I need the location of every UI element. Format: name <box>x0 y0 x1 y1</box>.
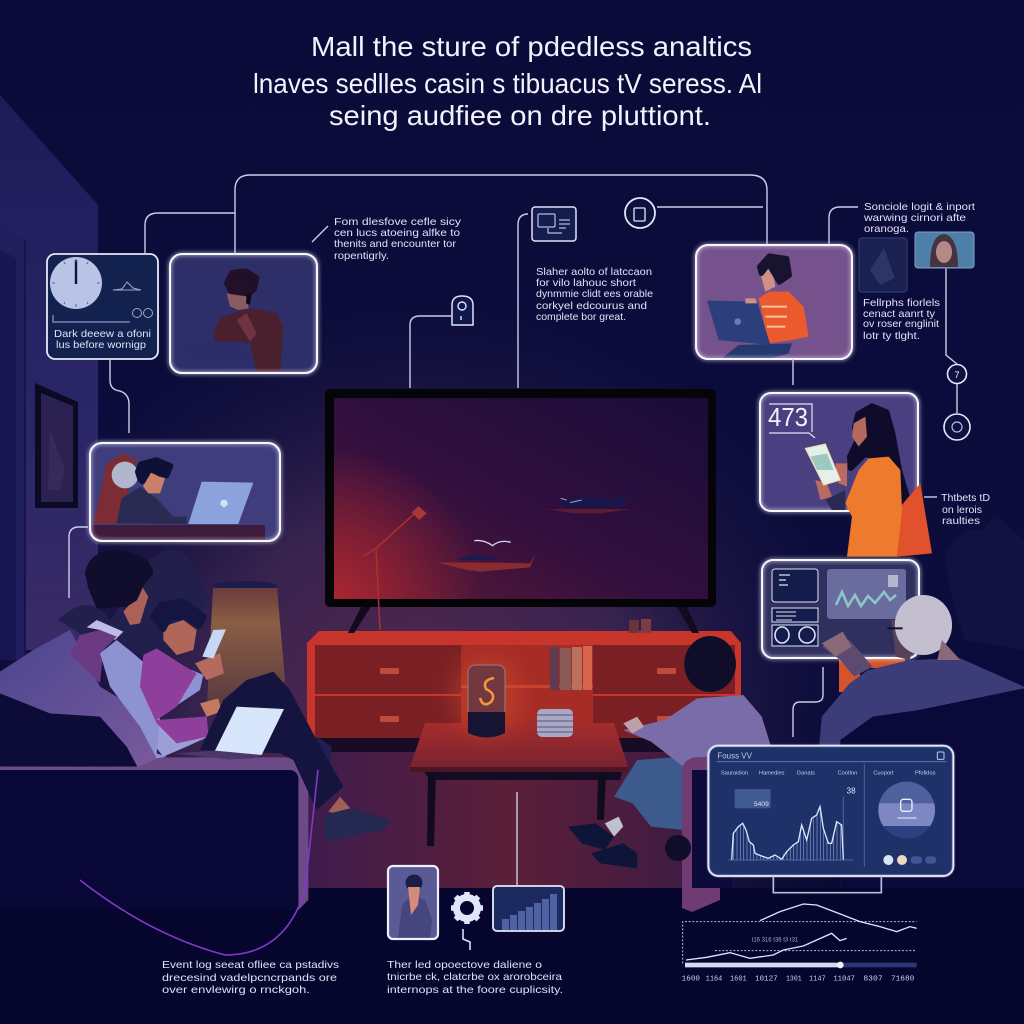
small arrow <box>463 929 470 950</box>
text: top centre note: cen lucs atoeing alfke to <box>334 227 460 239</box>
axis labels: 8307 <box>863 975 883 983</box>
sparkline timeline <box>682 904 917 983</box>
woman with tablet <box>805 406 932 557</box>
clock caption: lus before wornigp <box>56 339 146 351</box>
boy at desk <box>117 460 187 524</box>
dashboard stand <box>773 876 881 893</box>
floor lamp behind sofa <box>207 581 285 705</box>
bottom dark band <box>0 888 1024 1024</box>
mid label: t16 316 t36 t3 t31 <box>752 937 799 943</box>
orange block <box>839 658 905 692</box>
screen lamp <box>364 506 427 630</box>
text: centre note: corkyel edcourus and <box>536 300 647 312</box>
panel: woman with tablet <box>760 393 932 557</box>
number badge: 473 <box>768 402 808 432</box>
woman in orange sweater <box>722 256 809 360</box>
right armchair <box>665 757 732 912</box>
text: bottom centre note: tnicrbe ck, clatcrbe ox arorobceira <box>387 971 562 983</box>
text: right note: lotr ty tlght. <box>863 330 920 342</box>
text: top centre note: ropentigrly. <box>334 250 389 262</box>
dashboard column labels: Cootlon <box>838 771 857 777</box>
sofa cushion <box>0 630 160 767</box>
clock caption: Dark deeew a ofoni <box>54 328 151 340</box>
thumbnail: face <box>915 232 974 268</box>
text: bottom left note: drecesind vadelpcncrpands ore <box>162 972 337 984</box>
portrait figure <box>398 874 432 938</box>
dashboard info box <box>772 569 818 602</box>
dashboard value: 38 <box>847 786 856 795</box>
sofa shadow <box>0 693 137 767</box>
left shoe <box>323 797 392 842</box>
blue laptop <box>707 301 770 345</box>
coffee table <box>410 723 628 846</box>
text: right note: cenact aanrt ty <box>863 308 936 320</box>
panel: woman with laptop <box>696 245 852 360</box>
text: top centre note: thenits and encounter tor <box>334 238 457 250</box>
plant right <box>945 519 1024 650</box>
sofa body <box>0 757 308 910</box>
trend line upper <box>760 904 917 932</box>
small numbered nodes <box>944 364 970 440</box>
dashboard tooltip <box>735 789 771 808</box>
text: top right note: oranoga. <box>864 223 909 235</box>
text: tablet note: Thtbets tD <box>941 492 990 504</box>
screen aircraft upper <box>547 489 632 513</box>
dashboard gauges <box>772 625 818 646</box>
dashboard column labels: Pfofidos <box>915 771 936 777</box>
axis labels: 71680 <box>891 975 914 983</box>
axis labels: 1601 <box>730 975 747 983</box>
dashboard column labels <box>721 771 936 777</box>
axis labels: 11047 <box>833 975 855 983</box>
text: top centre note: Fom dlesfove cefle sicy <box>334 216 462 228</box>
curve accent <box>80 770 318 955</box>
person on phone <box>213 268 284 372</box>
text: centre note: Slaher aolto of latccaon <box>536 266 652 278</box>
text: tablet note: raulties <box>942 515 980 527</box>
chair and wall clock <box>93 453 138 524</box>
main title: lnaves sedlles casin s tibuacus tV seress. Al <box>253 68 762 99</box>
clock face <box>50 257 102 309</box>
laptop on sofa <box>173 707 284 759</box>
dashboard header <box>717 752 946 762</box>
icon: gear <box>451 892 483 924</box>
axis labels: 1147 <box>809 975 826 983</box>
glowing lamp <box>453 657 521 738</box>
panel: person with phone <box>170 254 317 373</box>
panel: phone portrait <box>388 866 438 939</box>
connector lines <box>69 175 957 885</box>
text: right note: ov roser englinit <box>863 318 939 330</box>
man on sofa <box>70 553 208 758</box>
floor <box>296 738 720 888</box>
dashboard tooltip: 5409 <box>754 801 769 808</box>
dashboard divider <box>843 763 864 867</box>
tv cabinet <box>307 619 741 752</box>
dashboard donut <box>877 782 937 839</box>
icon: tablet circle <box>625 198 655 228</box>
text: right note: Fellrphs fiorlels <box>863 297 940 309</box>
dashboard header: Fouss VV <box>717 752 753 761</box>
text: bottom left note: over envlewirg o rnckgoh. <box>162 984 310 996</box>
dashboard column labels: Ganats <box>797 771 815 777</box>
main title: Mall the sture of pdedless analtics <box>311 31 752 62</box>
text: centre note: dynmmie clidt ees orable <box>536 288 653 300</box>
plant behind sofa <box>58 550 210 660</box>
icon: speaker tag <box>452 296 473 325</box>
dashboard wave graph <box>827 569 906 619</box>
text: bottom left note: Event log seeat ofliee ca pstadivs <box>162 959 339 971</box>
icon: monitor card <box>532 207 576 241</box>
text: bottom centre note: internops at the foore cuplicsity. <box>387 984 563 996</box>
node seven: 7 <box>954 370 960 380</box>
panel: clock <box>47 254 158 359</box>
television <box>325 389 716 630</box>
seated older man <box>817 595 1024 888</box>
axis labels: 1600 <box>682 975 700 983</box>
panel: person with laptop at desk <box>90 443 280 541</box>
seated person centre <box>568 636 771 868</box>
axis labels <box>682 975 914 983</box>
text: top right note: warwing cirnori afte <box>863 212 966 224</box>
axis labels: 1164 <box>706 975 723 983</box>
screen aircraft lower <box>437 540 535 572</box>
left sofa, people and laptop <box>0 553 392 910</box>
axis labels: 1301 <box>786 975 802 983</box>
dashboard column labels: Hamedies <box>759 771 785 777</box>
slider <box>685 962 917 968</box>
text: top right note: Sonciole logit & inport <box>864 201 975 213</box>
young person with phone <box>140 601 343 810</box>
left wall with door <box>0 95 98 660</box>
tv stand legs <box>348 605 699 633</box>
text: bottom centre note: Ther led opoectove daliene o <box>387 959 542 971</box>
clock mini icons <box>132 308 152 318</box>
panel: main analytics dashboard <box>708 746 953 893</box>
clock mini sketch <box>113 282 141 290</box>
desk <box>93 525 265 540</box>
text: tablet note: on lerois <box>942 504 982 516</box>
text: centre note: complete bor great. <box>536 311 626 323</box>
panel: small dashboard <box>762 560 919 658</box>
thumbnail: dark <box>859 238 907 292</box>
dashboard column labels: Sauraidion <box>721 771 748 777</box>
wall picture <box>35 383 78 508</box>
panel: bar chart <box>493 886 564 931</box>
dashboard area chart <box>728 807 853 860</box>
node chat <box>944 414 970 440</box>
plate stack <box>537 709 573 737</box>
dashboard colour dots <box>883 855 936 865</box>
axis labels: 10127 <box>755 975 778 983</box>
trend line lower <box>686 933 847 960</box>
dashed guides <box>683 922 917 963</box>
laptop at desk <box>188 482 253 524</box>
text: centre note: for vilo lahouc short <box>536 277 636 289</box>
main title: seing audfiee on dre pluttiont. <box>329 100 711 131</box>
dashboard column labels: Cuoport <box>873 771 894 777</box>
dashboard text box <box>772 608 818 622</box>
